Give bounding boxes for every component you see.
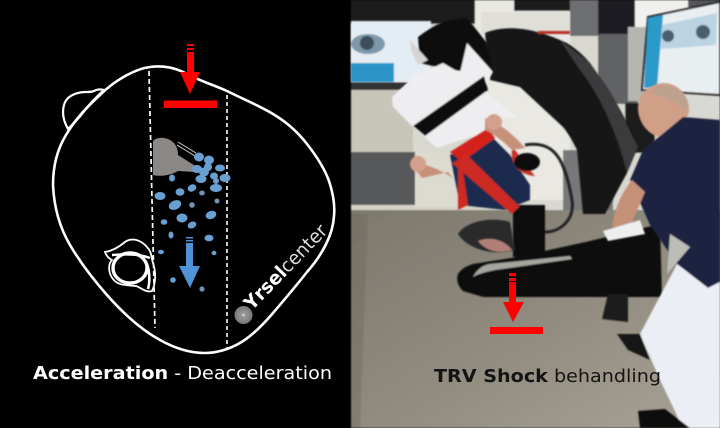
tilt machine	[457, 28, 662, 322]
ear outline	[63, 89, 104, 129]
logo text: Yrselcenter: Yrselcenter	[239, 220, 332, 315]
patient upside down	[392, 18, 540, 252]
head outline	[53, 66, 334, 353]
panel: head diagram	[0, 0, 351, 428]
otoconia crystals	[154, 152, 230, 292]
caption: Acceleration - Deacceleration: Acceleration - Deacceleration	[33, 363, 332, 384]
therapist	[603, 83, 720, 428]
logo ball	[234, 306, 252, 324]
red floor arrow	[490, 273, 543, 334]
dashed line right	[226, 95, 228, 348]
wall and floor backdrop	[351, 0, 720, 428]
red impact arrow	[164, 44, 217, 108]
cochlea / canal outline	[105, 240, 155, 291]
panel: treatment photo	[351, 0, 720, 428]
red impact bar	[164, 100, 217, 108]
red floor bar	[490, 327, 543, 334]
dashed line left	[149, 71, 155, 328]
caption: TRV Shock behandling: TRV Shock behandling	[434, 366, 661, 387]
inner ear organ	[153, 138, 197, 176]
blue fall arrow	[179, 237, 200, 288]
eye screen right	[642, 2, 720, 95]
eye screen left	[351, 21, 431, 82]
